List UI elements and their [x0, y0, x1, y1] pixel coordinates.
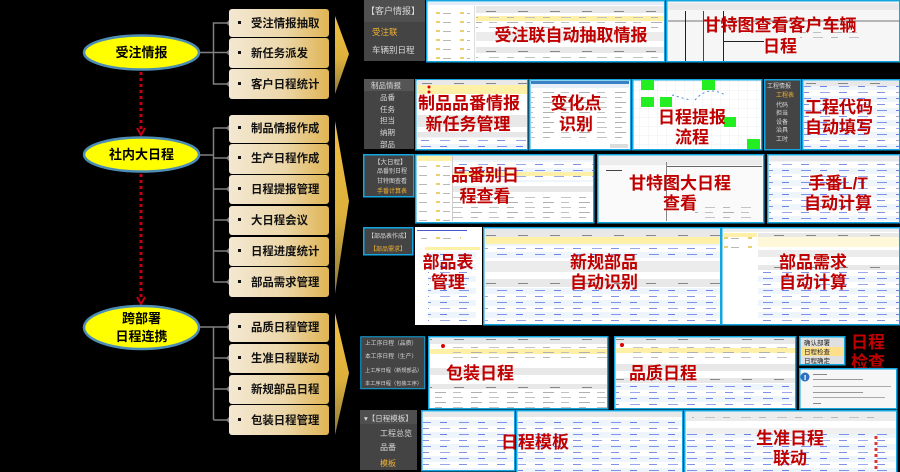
item: 生准日程联动: [229, 344, 329, 373]
caption: [570, 252, 638, 292]
sidebar: 制品品番: 任务: [380, 104, 395, 114]
item: 客户日程统计: [229, 69, 329, 99]
caption: [756, 429, 824, 468]
panel: 工程代码自动填写: [803, 80, 900, 150]
caption: 日程检查: 日程: [851, 333, 885, 352]
caption: 新任务管理: [426, 114, 510, 134]
item: 日程进度统计: [229, 237, 329, 266]
item: 品质日程管理: [229, 313, 329, 342]
sidebar: 制品品番: [364, 79, 414, 149]
caption: 查看: [663, 194, 697, 213]
panel: 变化点识别: [530, 80, 631, 150]
node: 跨部署日程连携: 跨部署: [122, 311, 161, 326]
panel: 日程检查菜单: 日程检查: [804, 347, 830, 356]
sidebar: 日程连携: [361, 337, 425, 389]
sidebar: 部品表: [364, 228, 413, 255]
item: 受注情报抽取: [229, 9, 329, 37]
caption: [804, 173, 872, 213]
caption: 自动计算: [804, 193, 872, 213]
chevron: group 2: [335, 121, 349, 294]
sidebar: 工程代码: 治具: [776, 126, 788, 134]
caption: [418, 94, 520, 134]
panel: 新规部品自动识别: [484, 228, 721, 325]
sidebar: 制品品番: 部品: [380, 139, 395, 149]
item: 大日程会议: 大日程会议: [251, 213, 309, 227]
chevron: group 1: [335, 16, 349, 94]
caption: 部品表: [422, 252, 474, 272]
item: 日程提报管理: 日程提报管理: [251, 182, 320, 196]
node: 社内大日程: [84, 138, 199, 172]
node: 受注情报: [84, 36, 199, 70]
sidebar: 日程模板: ▾【日程模板】: [364, 413, 413, 423]
caption: 日程提报: [658, 108, 726, 127]
caption: 自动识别: [570, 272, 638, 292]
sidebar: 客户情报: [364, 0, 425, 61]
item: 包装日程管理: 包装日程管理: [251, 413, 320, 427]
panel: 日程检查菜单: 确认部署: [804, 338, 830, 347]
item: 生产日程作成: 生产日程作成: [251, 151, 320, 165]
caption: [704, 15, 856, 56]
sidebar: 大日程: 手番计算表: [377, 187, 407, 195]
panel: 甘特图大日程查看: [598, 155, 764, 223]
panel: 部品需求自动计算: [722, 228, 900, 325]
sidebar: 制品品番: 担当: [380, 115, 395, 125]
caption: 流程: [675, 128, 709, 147]
chevron: group 3: [335, 313, 349, 435]
item: 新规部品日程: [229, 375, 329, 404]
sidebar: 制品品番: 品番: [380, 92, 395, 102]
caption: 品质日程: [629, 363, 697, 383]
item: 部品需求管理: [229, 267, 329, 297]
caption: 管理: [431, 272, 465, 292]
panel: 日程提报流程: [633, 80, 762, 150]
sidebar: 日程模板: 品番: [380, 442, 396, 452]
item: 部品需求管理: 部品需求管理: [251, 275, 320, 289]
sidebar: 大日程: 【大日程】: [374, 157, 406, 166]
item: 受注情报抽取: 受注情报抽取: [251, 16, 320, 30]
item: 新任务派发: 新任务派发: [251, 46, 309, 60]
sidebar: 工程代码: 工时: [776, 135, 788, 143]
sidebar: 大日程: [364, 155, 414, 197]
caption: [629, 174, 731, 213]
node: 跨部署日程连携: 日程连携: [115, 329, 168, 344]
panel: 受注联自动抽取情报: [427, 1, 665, 62]
item: 制品情报作成: 制品情报作成: [251, 121, 320, 135]
caption: 甘特图查看客户车辆: [704, 15, 856, 35]
item: 新任务派发: [229, 38, 329, 68]
item: 生产日程作成: [229, 144, 329, 174]
sidebar: 日程模板: [360, 410, 417, 470]
sidebar: 日程连携: 本工序日程（包装工序）: [365, 379, 422, 387]
panel: 包装日程: [429, 337, 608, 409]
sidebar: 工程代码: 设备: [776, 118, 788, 126]
item: 品质日程管理: 品质日程管理: [251, 320, 320, 334]
sidebar: 制品品番: 制品情报: [371, 80, 401, 90]
caption: 日程检查: [851, 333, 885, 372]
connector: group 2: [200, 125, 232, 285]
item: 大日程会议: [229, 206, 329, 235]
arrow: 受注情报 to 社内大日程: [137, 72, 145, 135]
caption: 部品需求: [779, 252, 847, 272]
panel: 日程模板右表: [517, 411, 683, 472]
caption: 日程: [763, 37, 797, 56]
panel: 品番别日程查看: [416, 155, 594, 223]
connector: group 3: [200, 324, 232, 423]
caption: [779, 252, 847, 292]
item: 包装日程管理: [229, 405, 329, 435]
sidebar: 日程模板: 工程总览: [380, 428, 412, 438]
caption: 自动填写: [805, 117, 873, 137]
caption: 联动: [773, 449, 807, 468]
caption: [422, 252, 474, 292]
caption: 识别: [559, 115, 593, 134]
caption: [805, 98, 873, 137]
panel: 日程模板左表: [422, 411, 515, 471]
item: 生准日程联动: 生准日程联动: [251, 351, 319, 365]
sidebar: 客户情报: 【客户情报】: [366, 5, 420, 16]
sidebar: 客户情报: 受注联: [372, 27, 398, 37]
sidebar: 客户情报: 车辆别日程: [372, 45, 415, 55]
sidebar: 工程代码: 代码: [776, 101, 788, 109]
sidebar: 日程模板: 模板: [380, 458, 396, 468]
item: 新规部品日程: 新规部品日程: [251, 382, 320, 396]
caption: [451, 166, 519, 206]
sidebar: 日程连携: 本工序日程（生产）: [365, 352, 417, 360]
sidebar: 部品表: 【部品需求】: [370, 245, 406, 253]
sidebar: 制品品番: 纳期: [380, 127, 395, 137]
sidebar: 工程代码: [765, 80, 801, 150]
item: 制品情报作成: [229, 115, 329, 143]
panel: 日程检查菜单: 日程确定: [804, 356, 830, 365]
sidebar: 工程代码: 担当: [776, 109, 788, 117]
caption: [550, 93, 602, 134]
caption: 日程检查: 检查: [851, 352, 885, 372]
caption: 新规部品: [570, 252, 638, 272]
caption: 日程模板: 日程模板: [501, 433, 569, 452]
caption: 变化点: [550, 93, 602, 113]
panel: 制品品番情报新任务管理: [416, 80, 528, 150]
node: 受注情报: 受注情报: [115, 45, 168, 60]
caption: 生准日程: [756, 429, 824, 448]
sidebar: 工程代码: 工程情报: [767, 82, 791, 90]
sidebar: 大日程: 品番别日程: [377, 167, 407, 175]
sidebar: 工程代码: 工程表: [776, 91, 794, 99]
node: 跨部署日程连携: [84, 306, 199, 349]
panel: 甘特图查看客户车辆日程: [667, 1, 900, 62]
panel: 提示对话框: [800, 369, 897, 409]
connector: group 1: [200, 20, 232, 87]
item: 客户日程统计: 客户日程统计: [251, 77, 320, 91]
item: 日程提报管理: [229, 175, 329, 204]
caption: 受注联自动抽取情报: [494, 25, 648, 45]
caption: 自动计算: [779, 272, 847, 292]
caption: 品番别日: [451, 166, 519, 185]
sidebar: 部品表: 【部品表作成】: [368, 232, 410, 240]
caption: 包装日程: [446, 363, 514, 383]
sidebar: 日程连携: 上工序日程（品质）: [365, 339, 417, 347]
caption: 甘特图大日程: [629, 174, 731, 193]
arrow: 社内大日程 to 跨部署日程连携: [137, 174, 145, 304]
caption: [658, 108, 726, 147]
node: 社内大日程: 社内大日程: [109, 147, 174, 162]
item: 日程进度统计: 日程进度统计: [251, 244, 320, 258]
panel: 日程检查菜单: [800, 337, 845, 365]
caption: 程查看: [460, 187, 510, 206]
panel: 品质日程: [615, 337, 796, 409]
caption: 工程代码: [805, 98, 873, 117]
caption: 制品品番情报: [418, 94, 520, 113]
panel: 部品表管理: [415, 227, 482, 325]
panel: 手番L/T自动计算: [768, 155, 900, 223]
sidebar: 大日程: 甘特图查看: [377, 177, 407, 185]
caption: 手番L/T: [808, 173, 868, 193]
panel: 生准日程联动: [685, 411, 897, 472]
sidebar: 日程连携: 上工序日程（新规部品）: [365, 366, 422, 374]
